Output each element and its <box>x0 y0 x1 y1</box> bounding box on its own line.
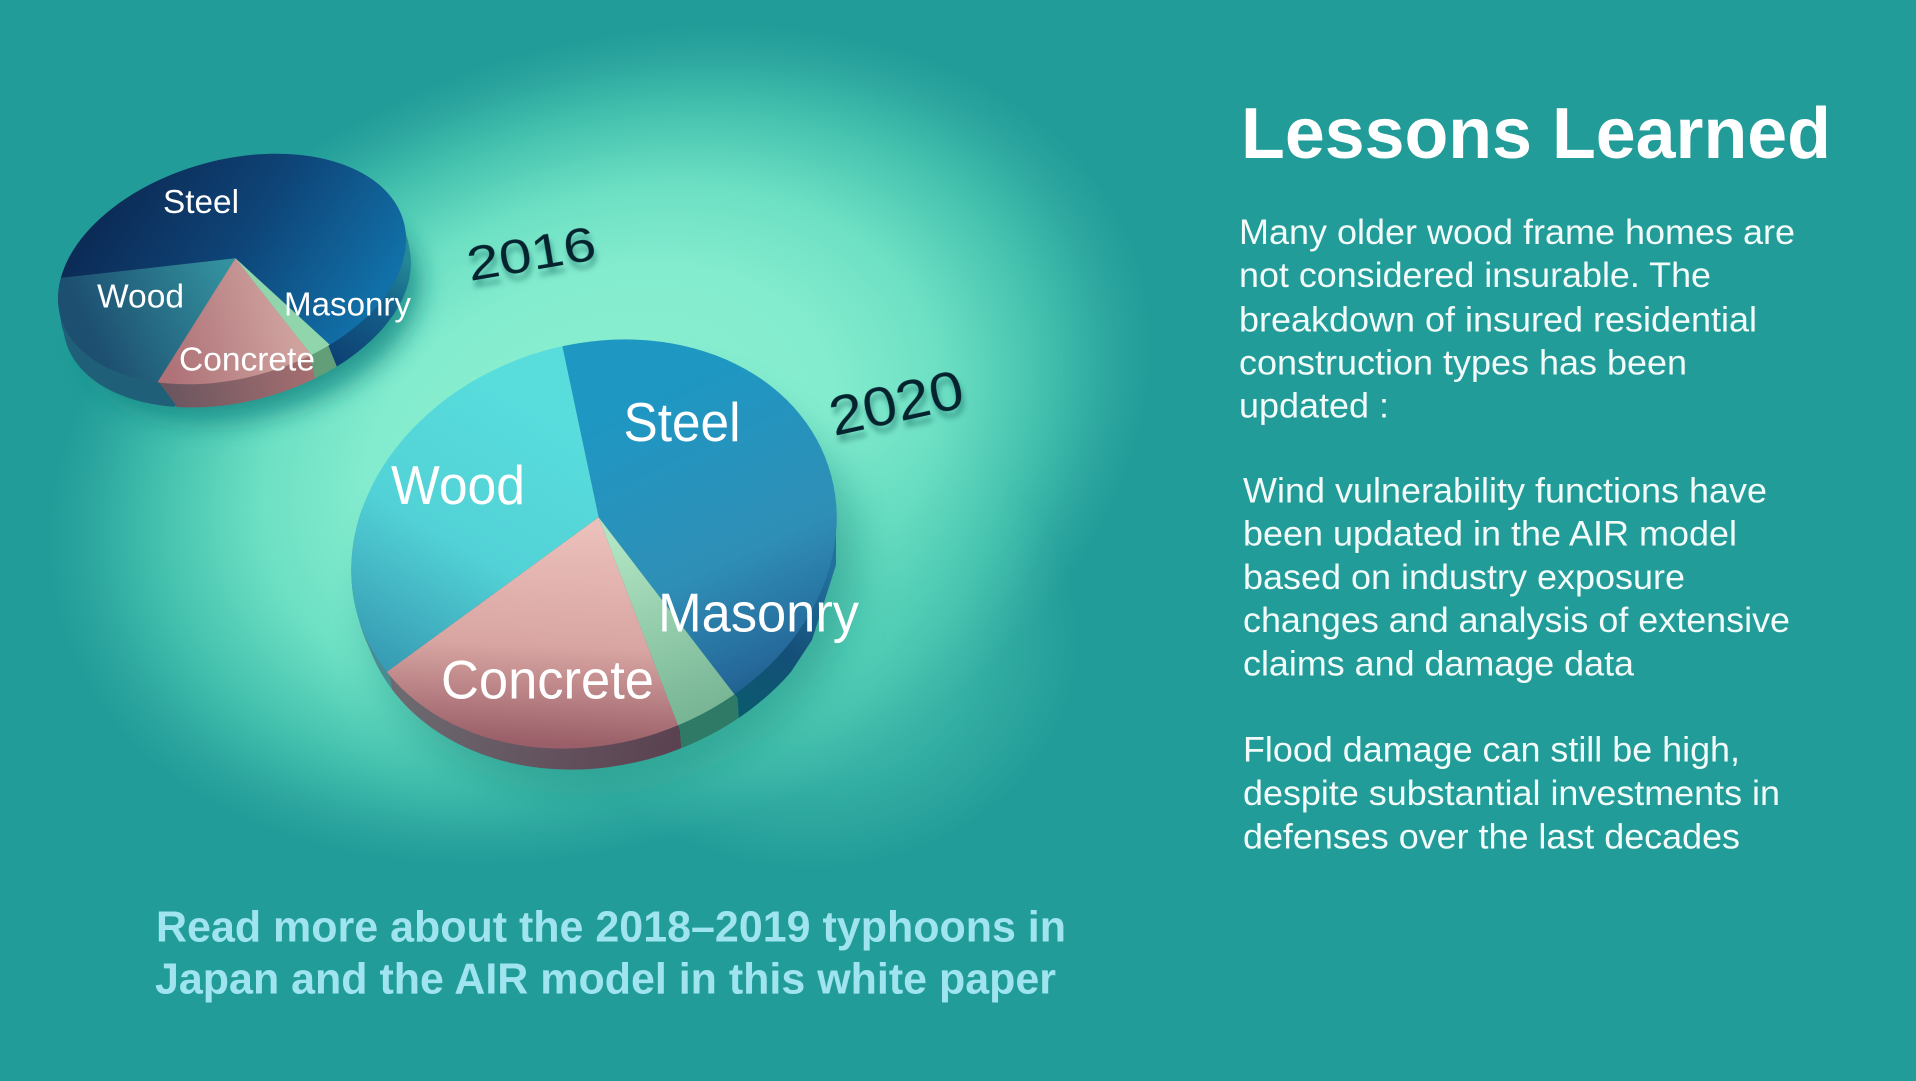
text block: insurable homes: updated : <box>1239 386 1389 426</box>
2020 pie top face <box>351 339 837 749</box>
text block: flood damage <box>1243 730 1780 856</box>
slice: concrete 2020 <box>387 517 678 749</box>
text block: insurable homes <box>1239 212 1795 426</box>
2016 pie top face <box>58 154 406 384</box>
slice: wood 2016 <box>58 258 236 381</box>
text block: insurable homes: construction types has been <box>1239 342 1687 382</box>
slice: wood 2020 <box>351 346 598 672</box>
heading: Lessons Learned: Lessons Learned <box>1241 94 1831 174</box>
text block: insurable homes: breakdown of insured residential <box>1239 300 1757 340</box>
slice: steel 2016 <box>60 154 406 344</box>
callout: white paper link: Japan and the AIR model in this white paper <box>155 954 1056 1003</box>
text block: wind vulnerability <box>1243 470 1790 684</box>
2016 pie side wall <box>58 182 411 408</box>
text block: wind vulnerability: Wind vulnerability functions have <box>1243 470 1767 510</box>
text block: flood damage: Flood damage can still be high, <box>1243 730 1740 770</box>
text block: wind vulnerability: been updated in the AIR model <box>1243 514 1737 554</box>
pie chart: 2016 construction types <box>58 154 436 437</box>
slice: masonry 2020 <box>598 518 734 726</box>
text block: flood damage: despite substantial investments in <box>1243 773 1780 813</box>
callout: white paper link: Read more about the 2018–2019 typhoons in <box>156 903 1066 952</box>
slice: steel 2020 <box>562 339 837 694</box>
label: Masonry: Masonry <box>284 287 411 324</box>
2020 pie side wall <box>351 510 836 770</box>
text block: insurable homes: Many older wood frame homes are <box>1239 212 1795 252</box>
year label 2016: 2016 <box>463 217 600 292</box>
slice: masonry 2016 <box>236 258 330 355</box>
text block: wind vulnerability: changes and analysis of extensive <box>1243 600 1790 640</box>
text block: flood damage: defenses over the last decades <box>1243 816 1740 856</box>
label: Concrete: Concrete <box>179 342 315 379</box>
year label 2020: 2020 <box>823 358 969 448</box>
label: Concrete: Concrete <box>441 650 654 711</box>
label: Steel: Steel <box>624 392 740 453</box>
label: Wood: Wood <box>391 455 525 516</box>
text block: wind vulnerability: based on industry exposure <box>1243 557 1685 597</box>
text block: wind vulnerability: claims and damage data <box>1243 644 1634 684</box>
callout: white paper link <box>155 903 1066 1003</box>
label: Masonry: Masonry <box>658 583 860 644</box>
text block: insurable homes: not considered insurable. The <box>1239 255 1711 295</box>
label: Steel: Steel <box>163 184 239 221</box>
slice: concrete 2016 <box>158 258 312 384</box>
label: Wood: Wood <box>97 279 184 316</box>
pie chart: 2020 construction types <box>351 339 874 804</box>
